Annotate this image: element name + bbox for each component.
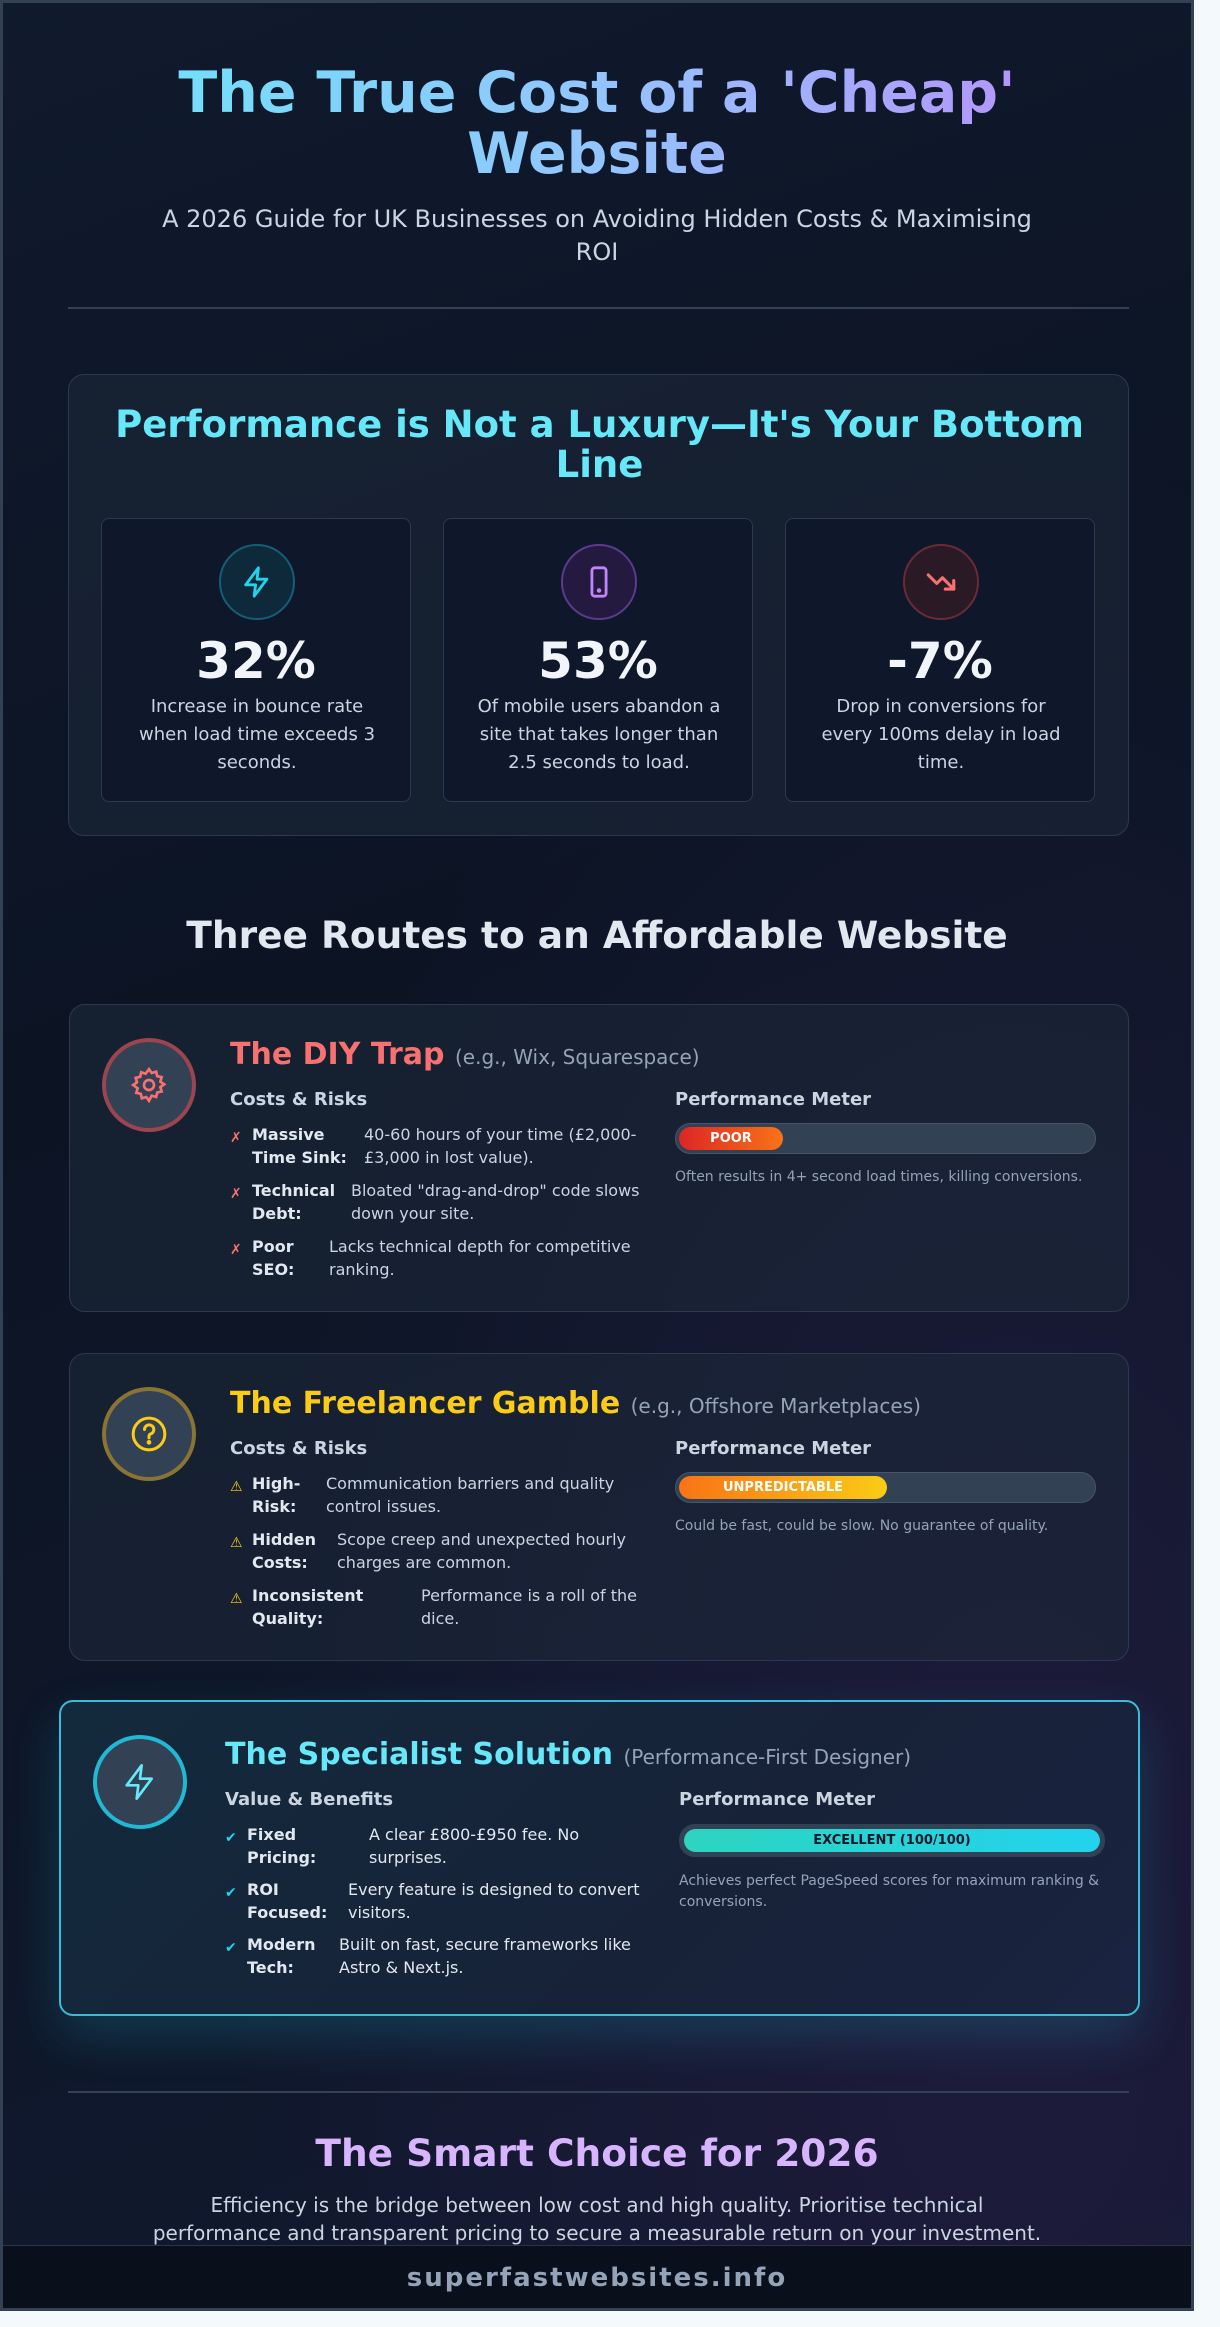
- list: risks: Massive Time Sink:: [252, 1125, 347, 1167]
- stat card: conversions: [785, 518, 1095, 802]
- stat card: mobile: 53%: [538, 632, 658, 690]
- list: benefits: ROI Focused:: [247, 1880, 327, 1922]
- list: risks: [230, 1474, 637, 1628]
- panel: specialist solution: Performance Meter: [679, 1789, 875, 1810]
- list: benefits: ✔: [225, 1940, 237, 1956]
- list: risks: Hidden Costs:: [252, 1530, 316, 1572]
- list: risks: [230, 1125, 640, 1279]
- icon: lightning: [93, 1735, 187, 1829]
- list: risks: Communication barriers and quality control issues.: [326, 1474, 614, 1516]
- panel: freelancer gamble: Costs & Risks: [230, 1438, 367, 1459]
- panel heading: Performance is Not a Luxury—It's Your Bottom Line: [115, 403, 1084, 486]
- list: benefits: Modern Tech:: [247, 1935, 316, 1977]
- title: Website: [467, 121, 727, 187]
- panel: DIY trap: Often results in 4+ second load times, killing conversions.: [675, 1169, 1082, 1185]
- footer: [3, 2245, 1191, 2311]
- panel: DIY trap: Costs & Risks: [230, 1089, 367, 1110]
- heading: The DIY Trap (e.g., Wix, Squarespace): [230, 1037, 700, 1072]
- panel: DIY trap: [69, 1004, 1129, 1312]
- list: risks: 40-60 hours of your time (£2,000-£3,000 in lost value).: [364, 1125, 636, 1167]
- panel: freelancer gamble: [69, 1353, 1129, 1661]
- section heading: Three Routes to an Affordable Website: [186, 913, 1008, 957]
- list: benefits: [225, 1825, 640, 1977]
- meter: poor: POOR: [710, 1131, 752, 1146]
- title: The True Cost of a 'Cheap': [178, 60, 1016, 126]
- list: benefits: ✔: [225, 1885, 237, 1901]
- list: benefits: Every feature is designed to convert visitors.: [348, 1880, 639, 1922]
- stat card: conversions: -7%: [887, 632, 993, 690]
- stat card: bounce rate: 32%: [196, 632, 316, 690]
- panel: specialist solution: [59, 1700, 1140, 2016]
- list: benefits: Fixed Pricing:: [247, 1825, 316, 1867]
- meter: excellent: [679, 1824, 1105, 1857]
- stat card: bounce rate: [101, 518, 411, 802]
- list: risks: Inconsistent Quality:: [252, 1586, 363, 1628]
- list: risks: ✗: [230, 1130, 242, 1146]
- stat card: bounce rate: Increase in bounce rate when load time exceeds 3 seconds.: [139, 696, 375, 773]
- icon: trend down: [903, 544, 979, 620]
- panel: specialist solution: Achieves perfect PageSpeed scores for maximum ranking & conversions.: [679, 1873, 1099, 1910]
- icon: lightning: [219, 544, 295, 620]
- stat card: mobile: [443, 518, 753, 802]
- closing heading: The Smart Choice for 2026: [315, 2131, 879, 2175]
- list: risks: Scope creep and unexpected hourly charges are common.: [337, 1530, 626, 1572]
- stat card: mobile: Of mobile users abandon a site that takes longer than 2.5 seconds to load.: [478, 696, 720, 773]
- list: benefits: ✔: [225, 1830, 237, 1846]
- meter: poor: [675, 1123, 1096, 1154]
- icon: gear: [102, 1038, 196, 1132]
- list: risks: ⚠: [230, 1535, 243, 1551]
- list: risks: Lacks technical depth for competitive ranking.: [329, 1237, 631, 1279]
- list: risks: ✗: [230, 1186, 242, 1202]
- list: risks: ⚠: [230, 1479, 243, 1495]
- panel: specialist solution: Value & Benefits: [225, 1789, 393, 1810]
- list: risks: Performance is a roll of the dice.: [421, 1586, 637, 1628]
- heading: The Freelancer Gamble (e.g., Offshore Marketplaces): [230, 1386, 921, 1421]
- list: risks: ⚠: [230, 1591, 243, 1607]
- list: risks: Bloated "drag-and-drop" code slows down your site.: [351, 1181, 640, 1223]
- panel: freelancer gamble: Performance Meter: [675, 1438, 871, 1459]
- list: risks: High-Risk:: [252, 1474, 300, 1516]
- stat card: conversions: Drop in conversions for every 100ms delay in load time.: [821, 696, 1061, 773]
- list: risks: Poor SEO:: [252, 1237, 294, 1279]
- panel: performance stats: [68, 374, 1129, 836]
- subtitle: A 2026 Guide for UK Businesses on Avoiding Hidden Costs & Maximising ROI: [162, 205, 1032, 266]
- icon: phone: [561, 544, 637, 620]
- panel: DIY trap: Performance Meter: [675, 1089, 871, 1110]
- footer: superfastwebsites.info: [407, 2263, 787, 2293]
- list: risks: Technical Debt:: [252, 1181, 335, 1223]
- panel: freelancer gamble: Could be fast, could be slow. No guarantee of quality.: [675, 1518, 1048, 1534]
- title: [3, 63, 1191, 185]
- list: risks: ✗: [230, 1242, 242, 1258]
- meter: unpredictable: [675, 1472, 1096, 1503]
- heading: The Specialist Solution (Performance-First Designer): [225, 1737, 911, 1772]
- closing text: Efficiency is the bridge between low cost and high quality. Prioritise technical performance and transparent pricing to secure a measurable return on your investment.: [153, 2193, 1041, 2245]
- meter: unpredictable: UNPREDICTABLE: [723, 1480, 843, 1495]
- list: benefits: A clear £800-£950 fee. No surprises.: [369, 1825, 579, 1867]
- list: benefits: Built on fast, secure frameworks like Astro & Next.js.: [339, 1935, 631, 1977]
- meter: excellent: EXCELLENT (100/100): [813, 1833, 971, 1848]
- icon: question: [102, 1387, 196, 1481]
